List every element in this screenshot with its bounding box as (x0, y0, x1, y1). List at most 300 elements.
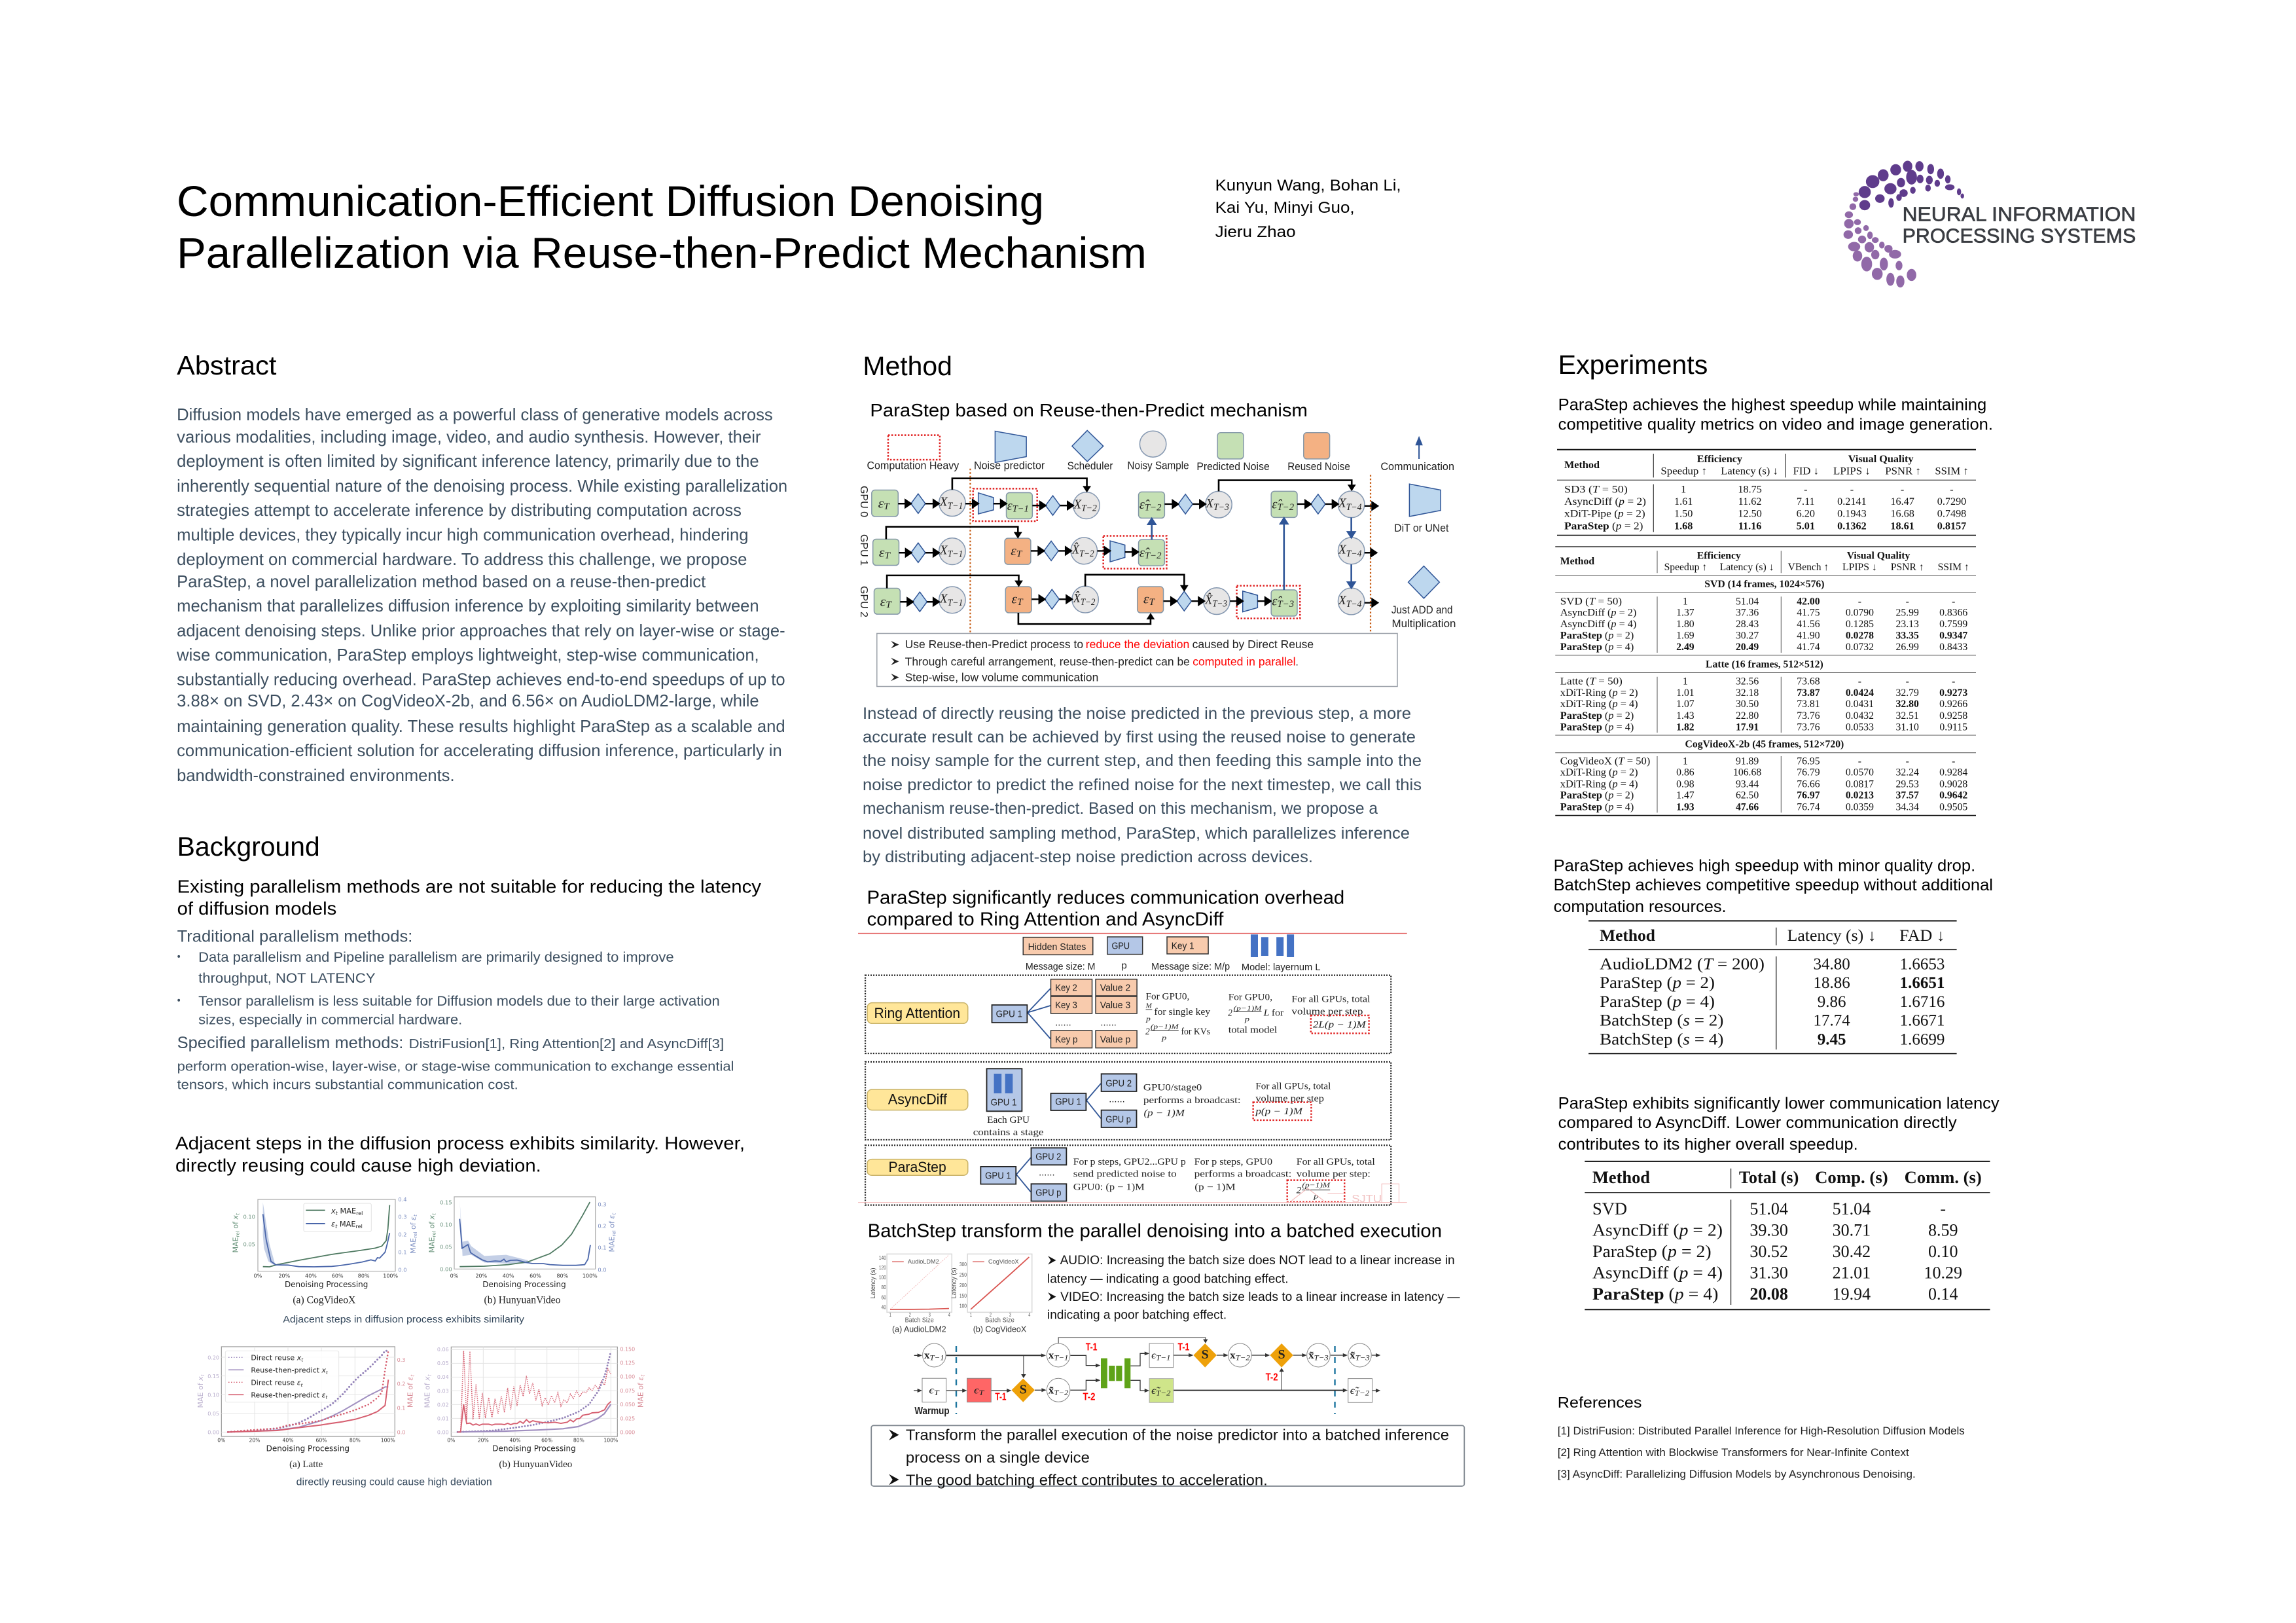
legend: message sizes: Message size: M/p (1151, 962, 1230, 972)
chart: AudioLDM2 batch latency: 60 (882, 1294, 886, 1300)
chart: CogVideoX batch latency (960, 1254, 1032, 1334)
table: video generation metrics: 0.0213 (1846, 790, 1874, 801)
table: image generation metrics: 0.2141 (1837, 496, 1867, 507)
chart: CogVideoX: t (335, 1224, 338, 1230)
GPU row labels: GPU 1 (858, 534, 869, 566)
abstract body text: wise communication, ParaStep employs lightweight, step-wise communication, (176, 645, 759, 665)
table: communication latency breakdown: 39.30 (1749, 1220, 1788, 1239)
reuse connectors (886, 479, 1355, 624)
row: AsyncDiff: GPU 1 (1055, 1097, 1081, 1107)
chart: HunyuanVideo similarity (427, 1197, 617, 1306)
table: image generation metrics (1557, 450, 1976, 536)
table: video generation metrics: 0.8366 (1939, 608, 1967, 619)
text: high speedup minor quality drop: computation resources. (1554, 898, 1727, 916)
GPU 2 row nodes: ε (1011, 593, 1020, 607)
chart: HunyuanVideo similarity: of (607, 1219, 616, 1230)
table: video generation metrics: 1.07 (1676, 699, 1695, 710)
text: high speedup minor quality drop: BatchStep achieves competitive speedup without additional (1554, 876, 1993, 894)
chart: Latte deviation: Direct reuse x (251, 1353, 301, 1362)
table: image generation metrics: SSIM ↑ (1935, 465, 1969, 477)
table: video generation metrics: 0.9258 (1939, 710, 1967, 721)
table: image generation metrics: 11.62 (1738, 496, 1762, 507)
chart: CogVideoX: of (231, 1220, 240, 1231)
text: highest speedup (1558, 396, 1993, 434)
row: ParaStep: GPU0: (p − 1)M (1073, 1181, 1145, 1192)
abstract body text: maintaining generation quality. These results highlight ParaStep as a scalable and (177, 716, 785, 736)
row: ParaStep: send predicted noise to (1073, 1169, 1177, 1179)
table: video generation metrics: Method (1560, 556, 1594, 567)
table: image generation metrics: 5.01 (1797, 520, 1815, 532)
GPU 2 row nodes: T−2 (1081, 597, 1095, 608)
chart: HunyuanVideo deviation: 0.02 (437, 1402, 449, 1408)
chart: AudioLDM2 batch latency (879, 1254, 952, 1334)
GPU 2 row nodes: X̂ (1073, 591, 1087, 606)
GPU 1 row nodes: T (884, 551, 891, 560)
references: [2] Ring Attention with Blockwise Transformers for Near-Infinite Context (1558, 1446, 1909, 1459)
chart: Latte deviation: 20% (249, 1438, 260, 1444)
heading: Background: Background (177, 832, 320, 862)
chart: HunyuanVideo similarity: 0.05 (440, 1243, 452, 1250)
subheading: existing parallelism: Existing parallelism methods are not suitable for reducing the latency (177, 876, 761, 897)
row: ParaStep: GPU 2 (1035, 1152, 1061, 1162)
references: [1] DistriFusion: Distributed Parallel Inference for High-Resolution Diffusion Models (1558, 1425, 1965, 1437)
chart: CogVideoX: MAE (337, 1219, 356, 1228)
chart: HunyuanVideo deviation: MAE of x (423, 1376, 432, 1408)
row: AsyncDiff: volume per step (1255, 1093, 1324, 1104)
chart: CogVideoX: rel (412, 1232, 418, 1238)
table: audio generation: ParaStep ( p = 4) (1600, 993, 1715, 1011)
table: image generation metrics: Visual Quality (1848, 453, 1913, 465)
table: video generation metrics: 0.0278 (1846, 630, 1874, 642)
chart: HunyuanVideo deviation: t (640, 1374, 646, 1377)
table: audio generation: 9.86 (1818, 993, 1846, 1011)
chart: Latte deviation: Direct reuse ε (251, 1379, 301, 1387)
table: video generation metrics: 37.57 (1896, 790, 1919, 801)
table: video generation metrics: 0.98 (1676, 779, 1695, 790)
chart: HunyuanVideo similarity: 60% (529, 1273, 541, 1279)
chart: HunyuanVideo deviation: 40% (509, 1438, 521, 1444)
row: ParaStep: GPU p (1035, 1188, 1061, 1198)
GPU row labels (858, 486, 869, 617)
chart: HunyuanVideo deviation: 0.00 (437, 1429, 449, 1435)
table: video generation metrics: 0.9505 (1939, 801, 1967, 812)
GPU 0 row nodes: X (940, 494, 954, 509)
table: video generation metrics: 1 (1683, 756, 1688, 767)
table: video generation metrics: - (1952, 756, 1955, 767)
table: video generation metrics: Latte (T = 50) (1560, 676, 1623, 687)
GPU 2 row nodes: X (940, 592, 954, 606)
side legend: add and multiplication: Just ADD and (1391, 604, 1453, 616)
side legend: DiT or UNet (1394, 484, 1449, 534)
subheading: communication overhead: compared to Ring Attention and AsyncDiff (867, 909, 1224, 929)
table: video generation metrics: 1.82 (1676, 721, 1695, 733)
chart: CogVideoX: 0.1 (398, 1249, 407, 1255)
row: AsyncDiff: For all GPUs, total (1255, 1080, 1331, 1091)
table: video generation metrics: 32.80 (1896, 699, 1919, 710)
table: audio generation: Latency (s) ↓ (1787, 927, 1876, 945)
callout: reuse-then-predict benefits: reduce the deviation (1086, 638, 1189, 651)
chart: Latte deviation: Denoising Processing (266, 1444, 350, 1453)
chart: CogVideoX: 0.4 (398, 1196, 407, 1203)
chart: HunyuanVideo similarity: MAE (427, 1237, 436, 1252)
chart: CogVideoX: rel (356, 1224, 363, 1230)
chart: CogVideoX: ε (331, 1219, 335, 1228)
chart: CogVideoX batch latency: Batch Size (985, 1317, 1014, 1324)
chart: AudioLDM2 batch latency: 2 (909, 1312, 911, 1318)
method explanation text: novel distributed sampling method, ParaStep, which parallelizes inference (863, 825, 1410, 843)
table: video generation metrics: 41.75 (1797, 608, 1820, 619)
table: image generation metrics: - (1950, 484, 1954, 496)
caption: adjacent steps similarity: Adjacent steps in diffusion process exhibits similarity (283, 1315, 525, 1325)
chart: Latte deviation: t (410, 1374, 416, 1377)
table: video generation metrics: 23.13 (1896, 619, 1919, 630)
batched execution flow diagram: x̃ (1049, 1385, 1054, 1396)
table: video generation metrics: 0.0431 (1846, 699, 1874, 710)
chart: HunyuanVideo deviation: 60% (541, 1438, 552, 1444)
table: video generation metrics: 41.74 (1797, 642, 1820, 653)
legend: message sizes: Model: layernum L (1242, 962, 1321, 972)
table: audio generation: 9.45 (1818, 1030, 1846, 1048)
table: video generation metrics: Visual Quality (1847, 550, 1910, 562)
GPU 2 row nodes: ε (1143, 593, 1152, 607)
table: video generation metrics: 17.91 (1736, 721, 1759, 733)
batched execution flow diagram: T (978, 1388, 984, 1397)
chart: AudioLDM2 batch latency: (a) AudioLDM2 (892, 1324, 946, 1334)
GPU 0 row nodes: ε̂ (1272, 497, 1281, 511)
callout: reuse-then-predict benefits: . (1296, 655, 1299, 668)
table: video generation metrics: 0.9266 (1939, 699, 1967, 710)
row: Ring Attention: For all GPUs, total (1291, 993, 1370, 1004)
chart: CogVideoX: MAE (338, 1206, 356, 1215)
chart: HunyuanVideo deviation: (b) HunyuanVideo (499, 1459, 572, 1470)
table: video generation metrics: - (1906, 596, 1909, 607)
chart: Latte deviation: Reuse-then-predict x (251, 1366, 326, 1375)
table: communication latency breakdown: 30.71 (1833, 1220, 1871, 1239)
row: Ring Attention: Key p (1055, 1034, 1078, 1045)
batched execution flow diagram: S (1278, 1347, 1285, 1362)
chart: HunyuanVideo similarity: t (431, 1213, 437, 1215)
legend: Predicted Noise (1196, 460, 1270, 473)
table: image generation metrics: ParaStep (p = 2) (1564, 520, 1643, 532)
chart: CogVideoX batch latency: 1 (970, 1312, 972, 1318)
table: video generation metrics (1555, 547, 1976, 816)
table: video generation metrics: VBench ↑ (1788, 562, 1829, 573)
text: high speedup minor quality drop: ParaStep achieves high speedup with minor quality drop. (1554, 857, 1975, 875)
table: image generation metrics: 1 (1681, 484, 1686, 496)
table: image generation metrics: xDiT-Pipe ( p = 2) (1564, 508, 1645, 520)
row: AsyncDiff: p(p − 1)M (1255, 1106, 1303, 1116)
table: video generation metrics: 106.68 (1733, 767, 1761, 778)
batched execution flow diagram: Warmup (914, 1405, 950, 1417)
table: video generation metrics: 1.47 (1676, 790, 1695, 801)
abstract body text: bandwidth-constrained environments. (177, 765, 455, 785)
abstract body text: substantially reducing overhead. ParaStep achieves end-to-end speedups of up to (177, 670, 785, 689)
chart: CogVideoX batch latency: 300 (960, 1262, 967, 1267)
subheading: ParaStep based on Reuse-then-Predict: ParaStep based on Reuse-then-Predict mechanism (870, 401, 1308, 420)
traditional parallelism methods list: sizes, especially in commercial hardware. (198, 1012, 462, 1028)
row: ParaStep: For p steps, GPU2...GPU p (1073, 1156, 1186, 1167)
chart: HunyuanVideo deviation: 0.100 (620, 1374, 635, 1380)
table: image generation metrics: 1.68 (1674, 520, 1693, 532)
table: communication latency breakdown: ParaStep ( p = 2) (1592, 1242, 1712, 1261)
chart: CogVideoX: 40% (305, 1273, 317, 1279)
chart: CogVideoX batch latency: 100 (960, 1303, 967, 1309)
table: video generation metrics: AsyncDiff (p = 2) (1560, 608, 1636, 619)
table: communication latency breakdown: 30.52 (1749, 1242, 1788, 1261)
table: image generation metrics: 6.20 (1797, 508, 1815, 520)
row: Ring Attention: (p−1)M (1234, 1005, 1262, 1012)
row: AsyncDiff: GPU0/stage0 (1143, 1082, 1202, 1093)
table: image generation metrics: Latency (s) ↓ (1721, 465, 1778, 477)
batched execution flow diagram: T-1 (995, 1391, 1007, 1403)
GPU 0 row nodes: ε̂ (1139, 498, 1148, 512)
table: video generation metrics: 0.1285 (1846, 619, 1874, 630)
GPU 0 row nodes: T−1 (948, 501, 963, 511)
timeline boundaries (970, 469, 1371, 632)
row: ParaStep: performs a broadcast: (1194, 1169, 1291, 1179)
table: video generation metrics: 0.86 (1676, 767, 1695, 778)
legend: Noise predictor (974, 459, 1045, 471)
row: AsyncDiff: AsyncDiff (888, 1091, 948, 1107)
subheading: communication overhead: ParaStep significantly reduces communication overhead (867, 887, 1344, 908)
chart: CogVideoX batch latency: 2 (990, 1312, 992, 1318)
table: video generation metrics: 76.79 (1797, 767, 1820, 778)
GPU 1 row nodes: T−2 (1079, 549, 1094, 559)
chart: CogVideoX (231, 1196, 418, 1306)
chart: CogVideoX batch latency: 4 (1028, 1312, 1030, 1318)
subheading: BatchStep: BatchStep transform the parallel denoising into a batched execution (868, 1220, 1442, 1241)
table: communication latency breakdown: Comm. (s) (1905, 1168, 1982, 1187)
GPU 1 row nodes: T−2 (1145, 551, 1161, 560)
table: audio generation: BatchStep ( s = 4) (1600, 1030, 1723, 1048)
batched execution flow diagram: S (1020, 1382, 1027, 1396)
table: image generation metrics: AsyncDiff ( p = 2) (1564, 496, 1646, 507)
chart: Latte deviation: 0.20 (207, 1355, 219, 1361)
row: Ring Attention: For GPU0, (1229, 991, 1272, 1002)
panel: communication overhead comparison (858, 887, 1407, 1205)
row: Ring Attention: 2 (1145, 1026, 1150, 1036)
table: video generation metrics: - (1906, 676, 1909, 687)
table: image generation metrics: Efficiency (1697, 453, 1742, 465)
table: video generation metrics: Latte (16 frames, 512×512) (1706, 659, 1823, 670)
GPU 1 row nodes: X (1338, 543, 1352, 557)
table: video generation metrics: 41.56 (1797, 619, 1820, 630)
row: ParaStep (865, 1145, 1391, 1205)
chart: HunyuanVideo deviation: MAE of ε (637, 1377, 645, 1408)
chart: Latte deviation: t (325, 1395, 328, 1400)
table: audio generation: 1.6716 (1900, 993, 1945, 1011)
table: video generation metrics: 0.0533 (1846, 721, 1874, 733)
table: communication latency breakdown: 51.04 (1749, 1199, 1788, 1218)
chart: CogVideoX: 60% (332, 1273, 344, 1279)
text: lower communication latency: compared to AsyncDiff. Lower communication directly (1558, 1114, 1957, 1132)
table: video generation metrics: Latency (s) ↓ (1720, 562, 1774, 573)
table: video generation metrics: 0.9028 (1939, 779, 1967, 790)
table: image generation metrics: LPIPS ↓ (1833, 465, 1871, 477)
table: video generation metrics: SVD (14 frames, 1024×576) (1704, 579, 1825, 590)
chart: Latte deviation: 60% (315, 1438, 327, 1444)
table: communication latency breakdown: 21.01 (1833, 1263, 1871, 1282)
abstract body text: inherently sequential nature of the denoising process. While existing parallelization (177, 477, 787, 496)
chart: CogVideoX: 0.3 (398, 1214, 407, 1220)
table: video generation metrics: 1.43 (1676, 710, 1695, 721)
GPU 1 row nodes (873, 536, 1365, 569)
text: highest speedup: competitive quality metrics on video and image generation. (1558, 416, 1993, 434)
table: image generation metrics: Speedup ↑ (1660, 465, 1707, 477)
chart: HunyuanVideo similarity: Denoising Processing (482, 1280, 566, 1289)
chart: Latte deviation: 0.15 (207, 1374, 219, 1379)
chart: HunyuanVideo similarity: 0.2 (598, 1222, 607, 1229)
table: video generation metrics: CogVideoX ( T = 50) (1560, 756, 1650, 767)
heading: Abstract: Abstract (177, 350, 277, 380)
GPU 1 row nodes: ε̂ (1139, 545, 1148, 560)
table: video generation metrics: - (1906, 756, 1909, 767)
legend: message sizes (1023, 934, 1321, 972)
chart: HunyuanVideo similarity: 0% (450, 1273, 459, 1279)
table: video generation metrics: 1.37 (1676, 608, 1695, 619)
chart: HunyuanVideo deviation: 0.000 (620, 1429, 635, 1435)
legend: Reused Noise (1287, 460, 1350, 473)
row: Ring Attention: volume per step (1291, 1006, 1363, 1017)
table: video generation metrics: 0.0817 (1846, 779, 1874, 790)
table: image generation metrics: - (1850, 484, 1854, 496)
chart: AudioLDM2 batch latency: Batch Size (905, 1317, 934, 1324)
table: video generation metrics: 0.7599 (1939, 619, 1967, 630)
chart: HunyuanVideo deviation: 0.050 (620, 1402, 635, 1408)
row: AsyncDiff: (p − 1)M (1144, 1107, 1185, 1118)
abstract body text: deployment is often limited by significant inference latency, primarily due to the (177, 451, 759, 471)
GPU 0 row nodes: X (1338, 496, 1352, 511)
batched execution flow diagram: T−2 (1156, 1389, 1171, 1397)
callout: reuse-then-predict benefits: Use Reuse-then-Predict process to (905, 638, 1083, 651)
GPU 0 row nodes: T−4 (1346, 502, 1362, 512)
GPU 2 row nodes: ε (880, 594, 889, 609)
batched execution flow diagram: ϵ (974, 1385, 982, 1396)
table: video generation metrics: 73.87 (1797, 687, 1820, 699)
subheading: existing parallelism: of diffusion models (177, 898, 336, 919)
subheading: existing parallelism (177, 876, 761, 919)
row: Ring Attention: 2 (1228, 1008, 1232, 1018)
GPU 2 row nodes: X (1338, 593, 1352, 608)
table: video generation metrics: PSNR ↑ (1891, 562, 1924, 573)
row: Ring Attention: total model (1229, 1024, 1277, 1035)
table: video generation metrics: xDiT-Ring (p = 4) (1560, 699, 1638, 710)
callout: reuse-then-predict benefits: Step-wise, low volume communication (905, 671, 1098, 684)
table: communication latency breakdown: AsyncDiff ( p = 2) (1592, 1220, 1723, 1239)
chart: HunyuanVideo deviation: 100% (603, 1438, 618, 1444)
logo: Neural Information Processing Systems: PROCESSING SYSTEMS (1903, 225, 2136, 247)
table: video generation metrics: 1.01 (1676, 687, 1695, 699)
charts: similarity of adjacent steps (231, 1196, 617, 1325)
abstract body text: communication-efficient solution for accelerating diffusion inference, particularly in (177, 740, 782, 760)
batched execution flow diagram (914, 1338, 1380, 1417)
watermark: SJTU: SJTU (1352, 1193, 1382, 1205)
chart: CogVideoX: 0.05 (243, 1241, 255, 1247)
table: video generation metrics: 20.49 (1736, 642, 1759, 653)
row: AsyncDiff: GPU 2 (1105, 1078, 1132, 1089)
table: image generation metrics: 0.7498 (1937, 508, 1966, 520)
table: video generation metrics: xDiT-Ring (p = 2) (1560, 687, 1638, 699)
table: video generation metrics: 0.9273 (1939, 687, 1967, 699)
table: communication latency breakdown: 19.94 (1833, 1285, 1871, 1304)
batched execution flow diagram: ϵ̃ (1151, 1385, 1159, 1396)
chart: HunyuanVideo deviation: 0.04 (437, 1374, 449, 1380)
row: Ring Attention: for KVs (1181, 1026, 1210, 1036)
GPU 1 row nodes: ε (1011, 544, 1020, 558)
subheading: adjacent steps: directly reusing could cause high deviation. (175, 1155, 541, 1176)
chart: Latte deviation: t (301, 1357, 304, 1363)
row: Ring Attention: Key 2 (1055, 983, 1077, 993)
batched execution flow diagram: T-2 (1083, 1391, 1095, 1403)
authors (1215, 177, 1401, 241)
GPU 1 row nodes: X̂ (1072, 543, 1086, 557)
table: audio generation: Method (1600, 927, 1655, 945)
title (177, 177, 1147, 277)
row: ParaStep: (p−1)M (1302, 1181, 1331, 1189)
callout: reuse-then-predict benefits: caused by Direct Reuse (1193, 638, 1314, 651)
batched execution flow diagram: T−2 (1236, 1353, 1250, 1362)
side legend: DiT or UNet: DiT or UNet (1394, 522, 1449, 534)
chart: CogVideoX: ε (409, 1216, 418, 1220)
GPU 2 row nodes: T−1 (948, 598, 963, 608)
table: audio generation: ParaStep ( p = 2) (1600, 974, 1715, 992)
chart: HunyuanVideo similarity: ε (607, 1215, 616, 1219)
method explanation text: by distributing adjacent-step noise prediction across devices. (863, 848, 1313, 866)
table: video generation metrics: ParaStep (p = 4) (1560, 721, 1634, 733)
row: Ring Attention: M (1145, 1002, 1152, 1010)
traditional parallelism methods list (177, 928, 720, 1028)
table: video generation metrics: CogVideoX-2b (45 frames, 512×720) (1685, 739, 1844, 750)
table: video generation metrics: 0.0432 (1846, 710, 1874, 721)
chart: HunyuanVideo similarity: of (427, 1220, 436, 1231)
abstract body text: multiple devices, they typically incur high communication overhead, hindering (177, 525, 749, 544)
row: AsyncDiff: performs a broadcast: (1143, 1095, 1241, 1105)
chart: AudioLDM2 batch latency: 140 (879, 1255, 886, 1261)
table: video generation metrics: 73.76 (1797, 721, 1820, 733)
table: video generation metrics: 62.50 (1736, 790, 1759, 801)
chart: Latte deviation: 0.3 (397, 1357, 405, 1363)
black flow arrows (898, 500, 1378, 606)
batching effect notes (1047, 1253, 1460, 1321)
row: AsyncDiff: Each GPU (987, 1114, 1030, 1125)
batched execution flow diagram: T−1 (930, 1353, 944, 1362)
table: image generation metrics: 11.16 (1738, 520, 1761, 532)
chart: HunyuanVideo similarity: 0.0 (598, 1266, 607, 1273)
table: video generation metrics: 1 (1683, 676, 1688, 687)
GPU 0 row nodes: ε (878, 496, 887, 511)
GPU 2 row nodes: T−3 (1278, 599, 1294, 610)
chart: HunyuanVideo deviation: 0.03 (437, 1388, 449, 1394)
row: Ring Attention: (p−1)M (1151, 1023, 1179, 1030)
table: video generation metrics: 0.8433 (1939, 642, 1967, 653)
text: highest speedup: ParaStep achieves the highest speedup while maintaining (1558, 396, 1986, 414)
chart: CogVideoX: t (234, 1213, 240, 1215)
batched execution flow diagram: S (1202, 1347, 1209, 1362)
chart: Latte deviation: MAE of x (196, 1376, 205, 1408)
table: video generation metrics: SSIM ↑ (1938, 562, 1969, 573)
table: communication latency breakdown: Method (1592, 1168, 1651, 1187)
references: References (1558, 1394, 1641, 1411)
callout: batched inference: process on a single device (906, 1450, 1090, 1466)
table: communication latency breakdown: ParaStep (p = 4) (1592, 1285, 1718, 1304)
table: video generation metrics: xDiT-Ring (p = 2) (1560, 767, 1638, 778)
row: Ring Attention: L for (1263, 1008, 1283, 1018)
table: communication latency breakdown: 20.08 (1749, 1285, 1788, 1304)
table: communication latency breakdown: SVD (1592, 1199, 1627, 1218)
batched execution flow diagram: x̃ (1308, 1349, 1314, 1361)
row: AsyncDiff: contains a stage (973, 1127, 1043, 1137)
chart: Latte deviation: 100% (381, 1438, 395, 1444)
